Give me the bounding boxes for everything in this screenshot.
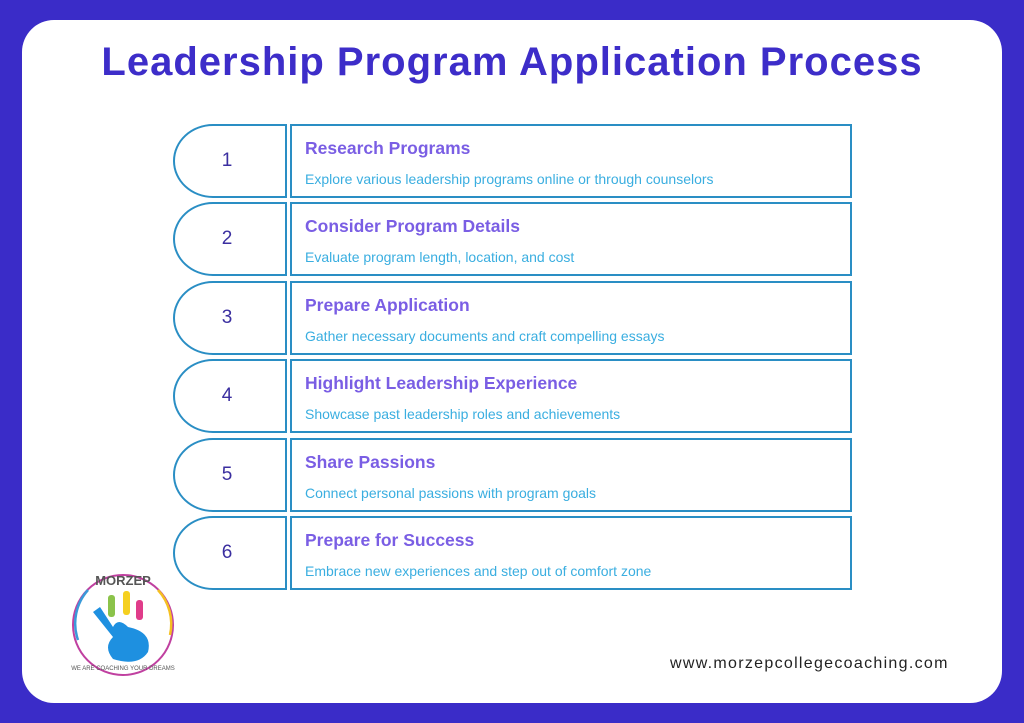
logo: MORZEP xyxy=(95,573,151,588)
step 1: Research Programs xyxy=(305,138,470,158)
step 5 xyxy=(173,438,852,512)
title: Leadership Program Application Process xyxy=(101,40,923,84)
step 5: 5 xyxy=(222,464,232,485)
step 4: 4 xyxy=(222,385,232,406)
step 5: Share Passions xyxy=(305,452,435,472)
step 4: Showcase past leadership roles and achievements xyxy=(305,406,620,422)
step 2: Consider Program Details xyxy=(305,216,520,236)
step 2 xyxy=(173,202,852,276)
step 4 xyxy=(173,359,852,433)
website url: www.morzepcollegecoaching.com xyxy=(670,655,949,672)
step 6: Embrace new experiences and step out of comfort zone xyxy=(305,563,651,579)
step 6: 6 xyxy=(222,542,232,563)
step 3: Gather necessary documents and craft compelling essays xyxy=(305,328,665,344)
step 3: 3 xyxy=(222,307,232,328)
step 1: Explore various leadership programs online or through counselors xyxy=(305,171,714,187)
step 6: Prepare for Success xyxy=(305,530,474,550)
step 3 xyxy=(173,281,852,355)
step 2: Evaluate program length, location, and cost xyxy=(305,249,574,265)
step 1 xyxy=(173,124,852,198)
step 5: Connect personal passions with program goals xyxy=(305,485,596,501)
step 2: 2 xyxy=(222,228,232,249)
step 3: Prepare Application xyxy=(305,295,470,315)
step 6 xyxy=(173,516,852,590)
logo xyxy=(71,573,175,676)
step 1: 1 xyxy=(222,150,232,171)
step 4: Highlight Leadership Experience xyxy=(305,373,577,393)
logo: WE ARE COACHING YOUR DREAMS xyxy=(71,666,175,672)
